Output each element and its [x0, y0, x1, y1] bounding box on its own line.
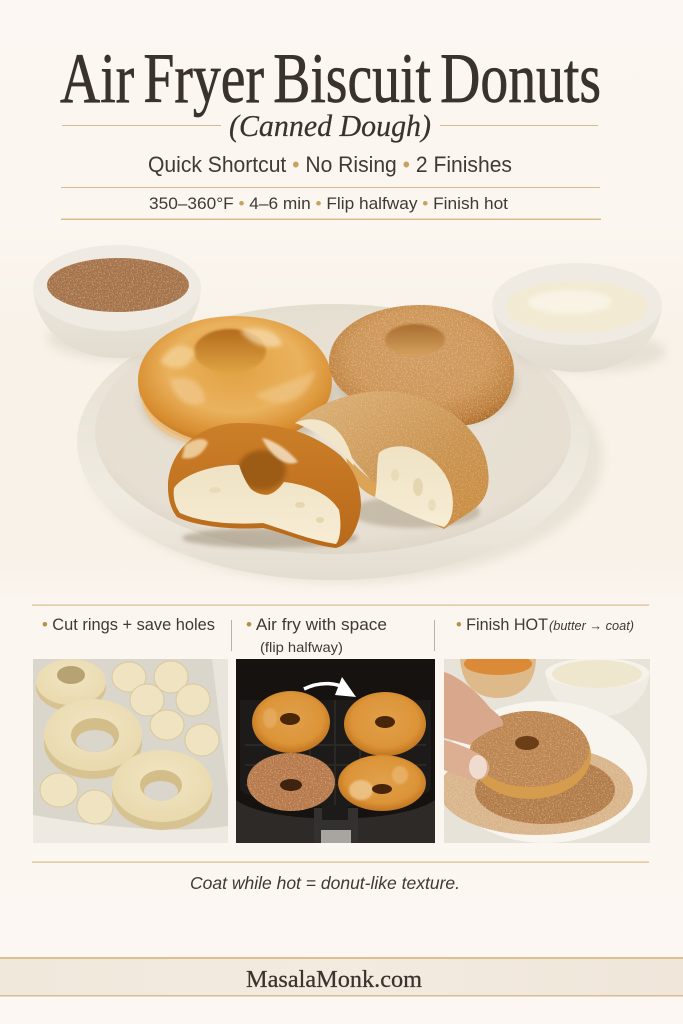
step label 3	[456, 616, 634, 634]
bowl: melted butter	[460, 659, 536, 698]
dough holes	[40, 661, 219, 824]
bowl: cinnamon sugar	[33, 245, 203, 360]
quick facts: 350–360°F • 4–6 min • Flip halfway • Finish hot	[149, 194, 508, 213]
donut: glazed cut	[168, 423, 361, 548]
donut: glazed whole	[138, 316, 334, 450]
tagline: Quick Shortcut • No Rising • 2 Finishes	[148, 152, 512, 177]
hand	[444, 672, 503, 780]
air-fried donut: glazed	[252, 691, 330, 753]
sugar pile	[444, 752, 633, 835]
step label 2: • Air fry with space	[246, 616, 387, 634]
footer band: MasalaMonk.com	[246, 967, 422, 993]
subtitle with side rules: (Canned Dough)	[229, 108, 431, 143]
air-fried donut: glazed 2	[338, 755, 426, 811]
step label 3: (butter → coat)	[549, 618, 634, 633]
donut: cinnamon cut	[295, 391, 489, 529]
air-fried donut: cinnamon	[247, 753, 335, 811]
panel: finish hot	[439, 653, 650, 843]
dough ring 3	[112, 750, 212, 830]
basket	[240, 700, 431, 806]
dough ring 1	[36, 659, 106, 711]
bowl: glaze	[492, 263, 666, 372]
parchment paper	[33, 659, 228, 843]
arrow: flip	[304, 677, 356, 697]
step label 2	[246, 616, 387, 655]
step label 2: (flip halfway)	[260, 639, 343, 655]
closing note: Coat while hot = donut-like texture.	[190, 873, 460, 893]
step label 3: • Finish HOT	[456, 616, 548, 634]
footer band	[0, 957, 683, 996]
fryer handle	[314, 806, 358, 844]
plate	[77, 304, 603, 583]
hero photo	[33, 245, 666, 583]
panel: air fryer basket	[236, 659, 435, 844]
donut: cinnamon whole	[329, 305, 515, 427]
plate	[443, 701, 647, 843]
dough ring 2	[44, 699, 142, 779]
coated donut	[469, 711, 591, 799]
step label 1: • Cut rings + save holes	[42, 616, 215, 634]
bowl: white glaze	[545, 658, 650, 717]
air-fried donut: plain	[344, 692, 426, 756]
panel: cut rings and holes	[33, 659, 228, 843]
